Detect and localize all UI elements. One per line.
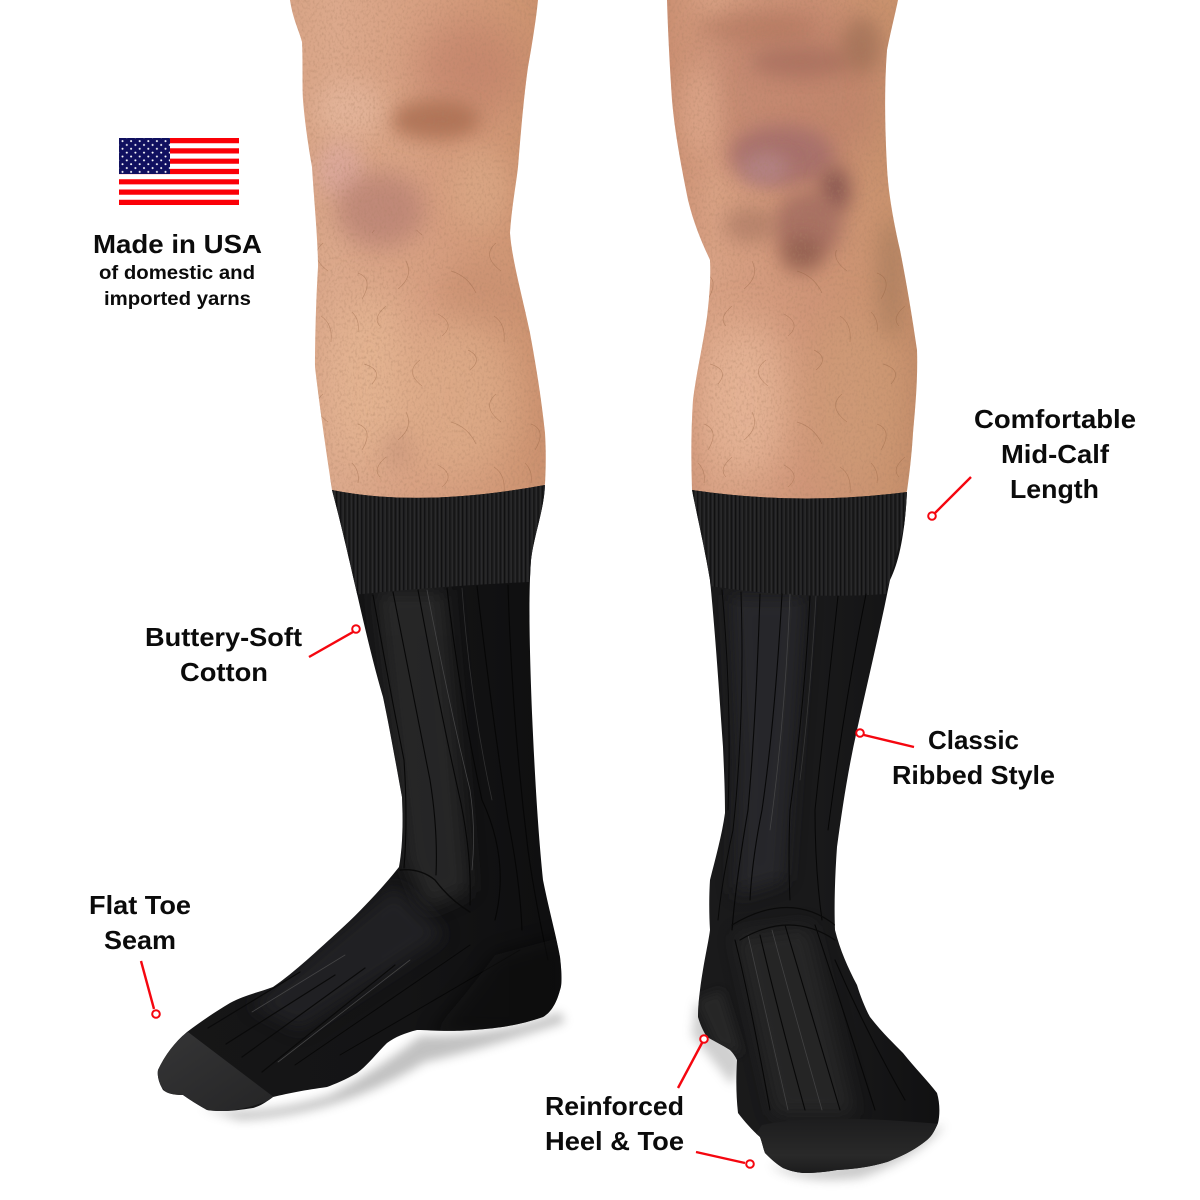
left leg	[290, 0, 546, 498]
callout: Flat Toe Seam: Seam	[104, 925, 176, 955]
callout: Flat Toe Seam: Flat Toe	[89, 890, 191, 920]
right leg	[667, 0, 918, 498]
right toe	[756, 1120, 938, 1173]
left toe	[155, 1032, 275, 1112]
callout: Flat Toe Seam	[89, 890, 191, 1018]
right sock ribs	[718, 590, 905, 1110]
callout: Buttery-Soft Cotton: Buttery-Soft	[145, 622, 302, 652]
left sock	[150, 480, 570, 1120]
callout: Comfortable Mid-Calf Length: Length	[1010, 474, 1099, 504]
right sock cuff	[692, 490, 907, 596]
callout: Buttery-Soft Cotton	[145, 622, 360, 687]
callout: Comfortable Mid-Calf Length: Mid-Calf	[1001, 439, 1109, 469]
knee shading right	[680, 0, 904, 485]
left heel patch	[435, 932, 562, 1031]
right ankle crease	[732, 908, 835, 940]
callout: Comfortable Mid-Calf Length: Comfortable	[974, 404, 1136, 434]
callout: Reinforced Heel & Toe: Heel & Toe	[545, 1126, 684, 1156]
callout: Reinforced Heel & Toe: Reinforced	[545, 1091, 684, 1121]
right sock light panel	[730, 595, 805, 895]
knee shading left	[315, 20, 525, 480]
flag: USA	[119, 138, 239, 205]
right sock	[685, 480, 950, 1180]
left ankle crease	[400, 870, 470, 912]
callout: Classic Ribbed Style: Classic	[928, 725, 1019, 755]
right heel patch	[698, 993, 738, 1056]
callout: Reinforced Heel & Toe	[545, 1035, 754, 1168]
text: Made in USA: imported yarns	[104, 289, 251, 310]
text: Made in USA: of domestic and	[99, 263, 255, 284]
left sock ribs	[208, 585, 548, 1072]
left sock light panel	[375, 590, 470, 910]
foot shadows	[200, 1000, 945, 1180]
text: Made in USA: Made in USA	[93, 229, 262, 259]
text: Made in USA	[93, 229, 262, 310]
callout: Buttery-Soft Cotton: Cotton	[180, 657, 268, 687]
callout: Classic Ribbed Style: Ribbed Style	[892, 760, 1055, 790]
left sock cuff	[325, 480, 550, 595]
callout: Comfortable Mid-Calf Length	[928, 404, 1136, 520]
callout: Classic Ribbed Style	[856, 725, 1055, 790]
